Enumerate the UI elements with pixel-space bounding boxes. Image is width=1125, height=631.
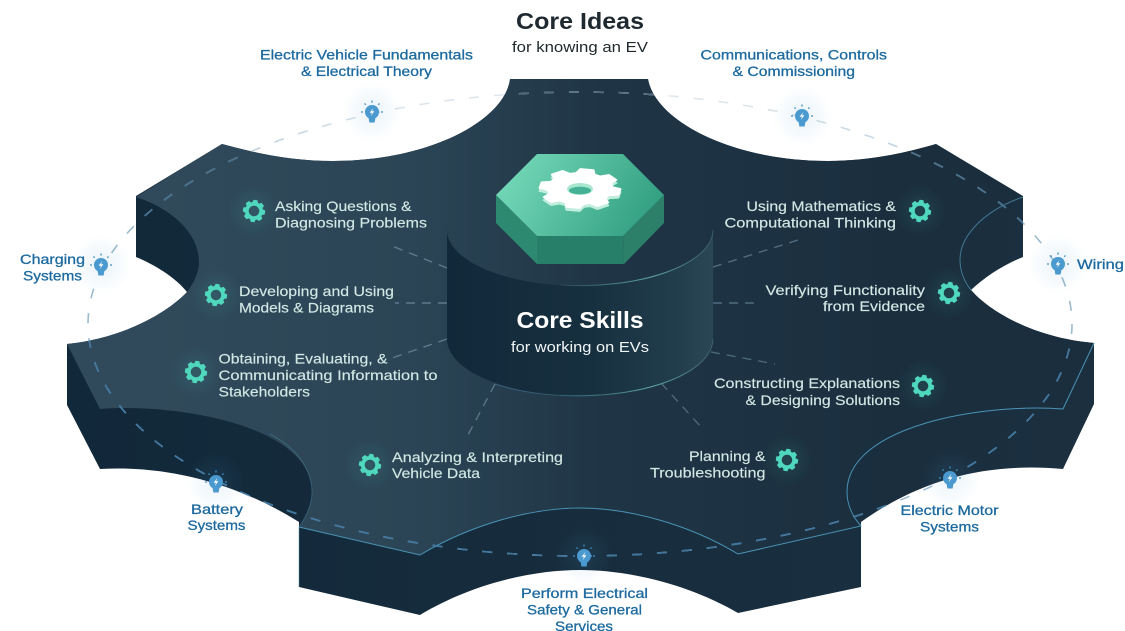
skill: verifying functionality: from Evidence: [823, 298, 925, 314]
skill: developing models: Models & Diagrams: [239, 300, 374, 316]
icon: bulb battery: [186, 452, 246, 512]
icon: bulb wiring: [1028, 234, 1088, 294]
skill: asking questions: Asking Questions &: [275, 198, 412, 214]
idea: ev fundamentals: Electric Vehicle Fundamentals: [260, 46, 473, 62]
skill: obtaining information: Communicating Information to: [218, 367, 438, 383]
idea: communications: Communications, Controls: [700, 46, 887, 62]
icon: bulb communications: [772, 86, 832, 146]
skill: developing models: [190, 269, 394, 321]
idea: electric motor systems: [900, 502, 999, 534]
core skills cylinder: [447, 174, 713, 396]
skill: constructing explanations: Constructing Explanations: [714, 375, 900, 391]
skill: using mathematics: Computational Thinking: [724, 214, 896, 230]
idea: wiring: Wiring: [1077, 256, 1124, 272]
title: core ideas: for knowing an EV: [512, 39, 648, 56]
skill: constructing explanations: [714, 360, 949, 412]
platform edge highlights: [270, 197, 1094, 587]
extruded platform walls: [67, 79, 1094, 615]
skill: obtaining information: Stakeholders: [218, 384, 310, 400]
skill: obtaining information: [170, 346, 438, 400]
idea: electrical safety: [521, 585, 648, 631]
skill: planning: Troubleshooting: [650, 464, 766, 480]
icon: bulb charging: [71, 235, 131, 295]
skill: asking questions: [228, 185, 427, 237]
skill: asking questions: Diagnosing Problems: [275, 214, 427, 230]
idea: battery systems: Systems: [188, 517, 246, 533]
skill: verifying functionality: Verifying Functionality: [766, 282, 925, 298]
title: core skills: for working on EVs: [511, 339, 649, 356]
icon: bulb motor: [920, 448, 980, 508]
idea: electrical safety: Safety & General: [527, 602, 642, 618]
hexagon gear block: [496, 154, 664, 264]
core ideas dashed ring: [88, 92, 1072, 556]
skill: using mathematics: Using Mathematics &: [746, 198, 897, 214]
skill: verifying functionality: [766, 267, 975, 319]
skill: developing models: Developing and Using: [239, 283, 394, 299]
title: core ideas: [512, 8, 648, 56]
idea: charging systems: Systems: [23, 268, 82, 284]
skill: using mathematics: [724, 185, 946, 237]
idea: charging systems: Charging: [20, 251, 85, 267]
idea: ev fundamentals: [260, 46, 473, 79]
title: core skills: Core Skills: [516, 307, 644, 333]
skill: planning: [650, 434, 813, 486]
idea: battery systems: [188, 501, 246, 533]
idea: communications: [700, 46, 887, 79]
idea: electric motor systems: Electric Motor: [900, 502, 999, 518]
skill: analyzing data: Analyzing & Interpreting: [392, 449, 563, 465]
skill: analyzing data: Vehicle Data: [392, 465, 480, 481]
icon: bulb fundamentals: [342, 82, 402, 142]
skill: obtaining information: Obtaining, Evaluating, &: [218, 350, 388, 366]
skill connector spokes: [392, 240, 798, 435]
skill: planning: Planning &: [689, 448, 766, 464]
skill: analyzing data: [344, 439, 563, 491]
title: core ideas: Core Ideas: [516, 8, 644, 34]
idea: electric motor systems: Systems: [920, 518, 979, 534]
title: core skills: [511, 307, 649, 356]
idea: communications: & Commissioning: [732, 63, 855, 79]
idea: battery systems: Battery: [191, 501, 243, 517]
skill: constructing explanations: & Designing Solutions: [746, 392, 900, 408]
idea: charging systems: [20, 251, 85, 284]
icon: bulb safety: [554, 526, 614, 586]
idea: electrical safety: Perform Electrical: [521, 585, 648, 601]
platform top surface: [67, 79, 1094, 555]
idea: ev fundamentals: & Electrical Theory: [301, 63, 432, 79]
icon: white gear: [534, 166, 626, 214]
